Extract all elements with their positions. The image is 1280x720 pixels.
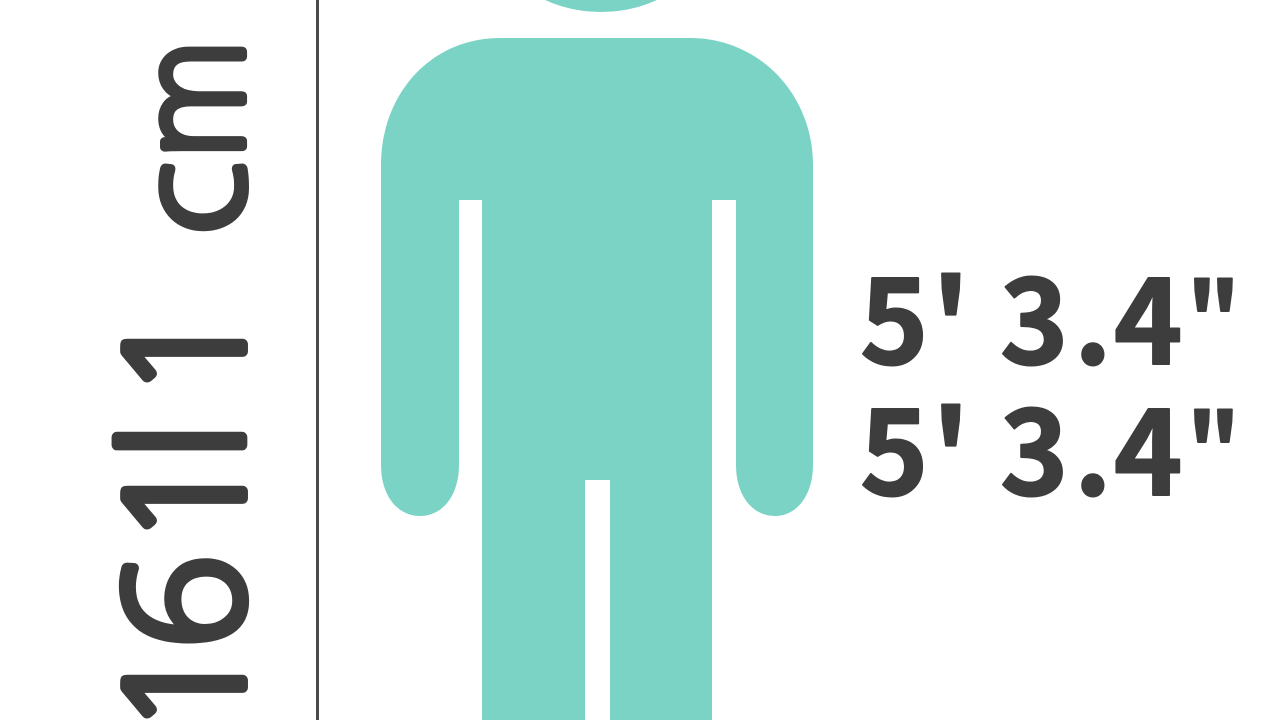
feet and inches line 2: "	[1187, 375, 1240, 508]
measurement line	[316, 0, 319, 720]
figure body	[381, 38, 813, 720]
vertical height label: c	[116, 162, 266, 236]
vertical height label	[106, 37, 268, 720]
vertical height label: m	[117, 37, 266, 161]
feet and inches line 1: "	[1187, 244, 1240, 377]
icon: person figure	[381, 0, 813, 720]
feet and inches line 1: 5'3.4	[860, 230, 1182, 398]
height in feet and inches	[860, 230, 1240, 529]
feet and inches line 2: 5'3.4	[860, 361, 1182, 529]
figure head	[500, 0, 702, 12]
